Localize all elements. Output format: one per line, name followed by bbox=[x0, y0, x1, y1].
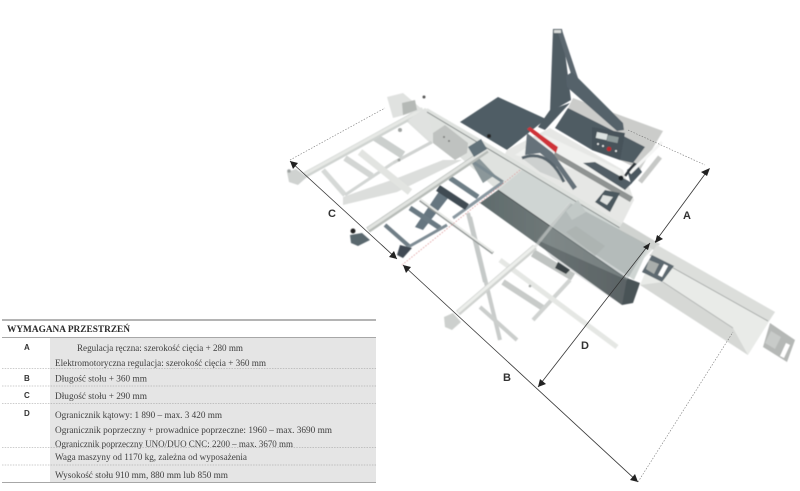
sliding beam rear part bbox=[408, 108, 487, 160]
lower outrigger table bbox=[444, 217, 617, 347]
row D bbox=[24, 409, 333, 450]
dark rear table plate bbox=[555, 108, 645, 163]
table background bbox=[50, 338, 376, 482]
long rip fence bbox=[553, 152, 633, 202]
row B: Długość stołu + 360 mm bbox=[55, 374, 148, 384]
row A: Elektromotoryczna regulacja: szerokość cięcia + 360 mm bbox=[55, 359, 267, 369]
dimension B bbox=[403, 265, 638, 482]
outer band near fence end bbox=[618, 222, 660, 250]
dimension B: B bbox=[503, 372, 511, 384]
mid bracket bbox=[642, 255, 674, 282]
beam grey block bbox=[433, 125, 468, 160]
dimension D: D bbox=[581, 340, 589, 352]
row D: Ogranicznik poprzeczny UNO/DUO CNC: 2200 – max. 3670 mm bbox=[55, 440, 294, 450]
dimension A: A bbox=[683, 210, 691, 222]
table title: WYMAGANA PRZESTRZEŃ bbox=[7, 323, 130, 335]
outer sliding beam bbox=[640, 245, 775, 355]
row B: B bbox=[24, 374, 30, 383]
main table top bbox=[497, 128, 660, 245]
row A bbox=[24, 343, 267, 369]
dotted extension lines bbox=[290, 108, 733, 482]
top band bbox=[498, 170, 650, 280]
glass guard bbox=[537, 203, 648, 280]
weight row: Waga maszyny od 1170 kg, zależna od wyposażenia bbox=[55, 453, 248, 463]
fence support bbox=[583, 162, 632, 190]
row D: Ogranicznik poprzeczny + prowadnice poprzeczne: 1960 – max. 3690 mm bbox=[55, 426, 333, 436]
row C: Długość stołu + 290 mm bbox=[55, 392, 148, 402]
row C: C bbox=[24, 391, 30, 400]
back outrigger table bbox=[287, 109, 462, 205]
dimension D bbox=[538, 243, 650, 387]
sliding beam top bbox=[427, 108, 657, 262]
dimension C bbox=[290, 161, 397, 259]
beam end block bbox=[387, 93, 423, 118]
table top rule bbox=[2, 319, 376, 321]
row A: Regulacja ręczna: szerokość cięcia + 280 mm bbox=[77, 344, 244, 354]
dimension C: C bbox=[328, 208, 336, 220]
control panel bbox=[592, 127, 625, 160]
blade guard bbox=[525, 133, 577, 190]
row D: Ogranicznik kątowy: 1 890 – max. 3 420 mm bbox=[55, 411, 223, 421]
front outrigger table bbox=[350, 134, 503, 282]
row A: A bbox=[24, 343, 30, 352]
blade cut circle bbox=[522, 156, 564, 182]
arm column bbox=[550, 29, 571, 112]
dark table extension bbox=[460, 97, 546, 150]
light rear table bbox=[568, 98, 663, 170]
cantilever arm bbox=[566, 72, 624, 131]
table: required space bbox=[2, 319, 376, 482]
fence dark side panel bbox=[480, 190, 633, 305]
row C bbox=[24, 391, 148, 402]
dimension A bbox=[655, 168, 710, 243]
carriage block bbox=[402, 100, 417, 115]
small bracket under fence bbox=[595, 190, 620, 212]
red dotted datum line bbox=[402, 170, 520, 265]
table end bracket bbox=[763, 323, 795, 362]
row D: D bbox=[24, 409, 30, 418]
height row: Wysokość stołu 910 mm, 880 mm lub 850 mm bbox=[55, 471, 229, 481]
machine illustration bbox=[287, 29, 795, 362]
